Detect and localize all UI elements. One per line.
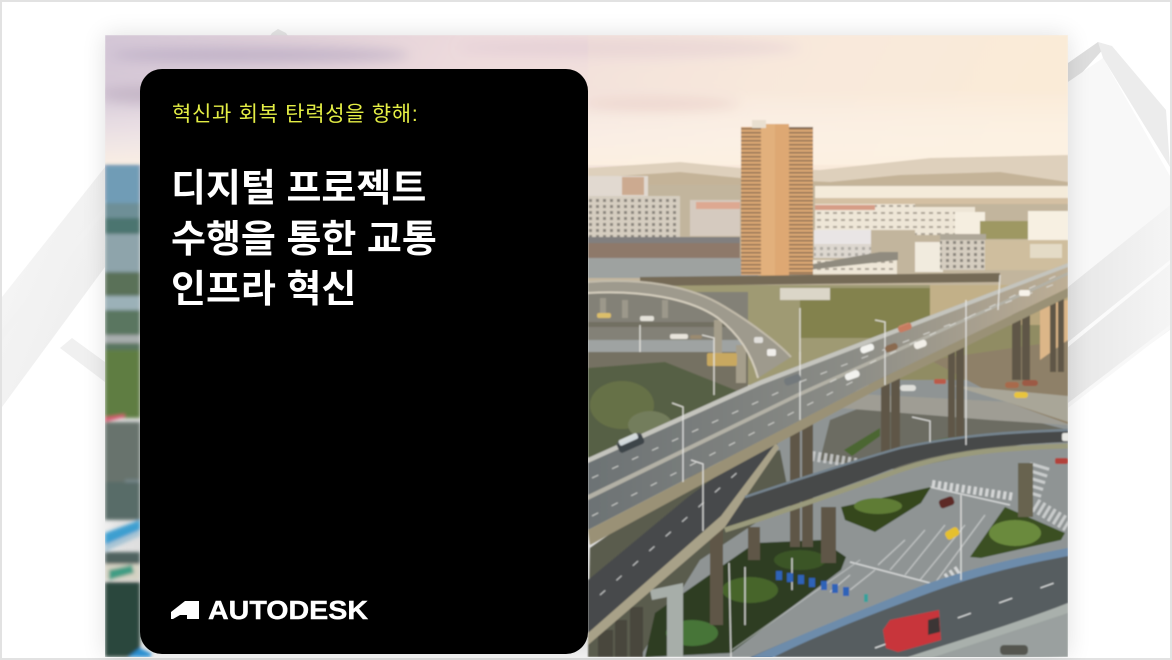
green medians: [645, 428, 1065, 657]
sky: [100, 35, 1068, 200]
road: upper overpass: [588, 263, 1068, 545]
town: middle distance: [588, 176, 1068, 295]
road: curved ramp: [588, 281, 791, 378]
background shape: right glass prism: [1068, 42, 1170, 408]
ground behind the ramps: [588, 285, 1068, 470]
ground plane with pavement: [588, 300, 1068, 657]
crosswalks: [812, 456, 1068, 583]
horizontal back bridge: [640, 273, 1000, 286]
distant hills: [588, 154, 1068, 186]
road: diagonal lower road: [588, 440, 779, 645]
vehicles: [597, 290, 1070, 655]
tower block: [741, 120, 813, 276]
main title: 인프라 혁신: [171, 269, 356, 311]
photo: highway interchange: [100, 35, 1070, 660]
road: curved ramp over junction: [725, 430, 1068, 530]
main title: 수행을 통한 교통: [171, 218, 437, 260]
road markings on junction: [732, 515, 985, 650]
bridge pillars: [598, 295, 1064, 657]
road: foreground curve: [745, 548, 1068, 660]
black title card: [140, 69, 588, 654]
lamp posts: [640, 275, 1000, 657]
photo drop shadow: [105, 35, 1068, 657]
main title: 디지털 프로젝트: [171, 168, 426, 210]
left strip of photo: [105, 165, 152, 657]
background shape: left glass band: [2, 29, 288, 407]
main title: [171, 168, 437, 311]
blue road signs: [776, 571, 868, 602]
eyebrow heading: 혁신과 회복 탄력성을 향해:: [172, 103, 418, 126]
warm haze over upper photo: [588, 124, 1068, 457]
